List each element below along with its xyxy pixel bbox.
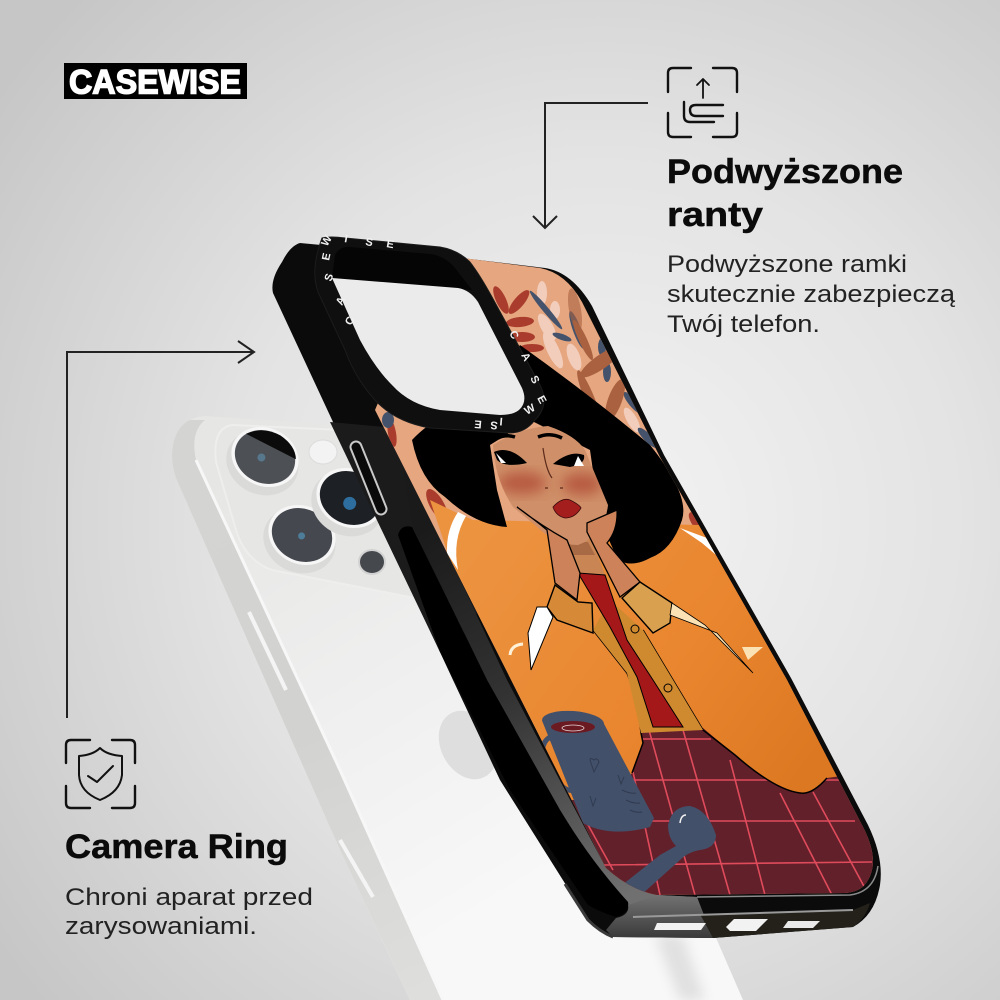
bottom-right dark section: [700, 903, 870, 938]
eyes: [494, 450, 527, 465]
icon: shield: [66, 740, 135, 808]
bottom rim highlight: [633, 910, 853, 917]
jacket placket: [593, 600, 703, 733]
side black stripe: [398, 526, 628, 917]
shirt buttons: [631, 625, 672, 692]
jacket: [430, 500, 848, 800]
lidar sensor: [359, 550, 385, 574]
lower inner bezel: [398, 440, 697, 912]
camera ring: [315, 233, 548, 433]
ring frame: [315, 237, 544, 433]
face: [493, 426, 608, 545]
arrow: to camera ring: [67, 341, 254, 718]
hair: [412, 345, 683, 564]
case shell: [272, 243, 881, 938]
phone body: [172, 416, 743, 1000]
mug: [541, 709, 654, 832]
nose: [543, 448, 563, 488]
text: raised edges description: [667, 251, 956, 338]
volume button: [356, 447, 381, 509]
right cuff: [622, 582, 672, 633]
ring label: CASEWISE: [319, 233, 395, 327]
bottom speaker hole: [726, 919, 768, 931]
red shirt: [578, 573, 683, 727]
white phone: [160, 415, 743, 1000]
arrow: to raised edges: [533, 103, 648, 228]
heading: raised edges: Podwyższone: [667, 153, 903, 191]
brand logo: CASEWISE: [69, 64, 241, 102]
table: [540, 728, 890, 900]
band highlight: [196, 460, 443, 1000]
lower-left rim: [565, 884, 613, 937]
screen edge highlight: [697, 866, 878, 897]
ring hole: [332, 278, 524, 415]
heading: camera ring: Camera Ring: [65, 828, 288, 866]
heading: raised edges: [667, 153, 903, 234]
lens 1: [215, 415, 311, 507]
right hand: [587, 510, 640, 597]
jacket arm outlines: [593, 630, 827, 793]
leaves: [382, 281, 715, 541]
collar hook: [510, 644, 523, 655]
brows: [498, 435, 562, 438]
text: camera ring description: zarysowaniami.: [65, 913, 257, 940]
cream stripe: [670, 603, 753, 673]
white collar left: [447, 512, 466, 570]
case artwork: [370, 250, 890, 900]
white collar right: [680, 528, 716, 555]
neck shadow: [570, 542, 595, 555]
text: raised edges description: Twój telefon.: [667, 311, 820, 338]
text: camera ring description: Chroni aparat przed: [65, 884, 313, 911]
text: raised edges description: skutecznie zabezpieczą: [667, 281, 956, 308]
flash: [309, 440, 337, 464]
ring inner wall: [332, 247, 472, 290]
neck: [574, 539, 605, 574]
bottom shadow streak: [655, 935, 705, 1000]
side buttons: [249, 612, 373, 897]
white collar flap: [528, 607, 553, 670]
blush: [498, 472, 602, 495]
bottom port: [654, 923, 706, 930]
phone side band: [160, 420, 443, 1000]
translucent section over phone: [330, 422, 477, 652]
bottom-left gray section: [606, 895, 713, 938]
artwork background: [370, 250, 890, 900]
left hand: [517, 507, 580, 600]
apple logo: [439, 710, 494, 780]
camera plateau: [215, 425, 425, 600]
ring label mirrored: CASEWISE: [474, 329, 548, 431]
bottom mic hole: [783, 921, 820, 928]
icon: raised edges: [668, 68, 737, 137]
spoon: [622, 806, 716, 896]
lips: [553, 499, 581, 518]
left cuff: [547, 585, 593, 633]
text: raised edges description: Podwyższone ramki: [667, 251, 907, 278]
lens 2: [252, 493, 348, 585]
phone case: [272, 243, 881, 938]
text: camera ring description: [65, 884, 313, 940]
cream flick: [742, 647, 763, 660]
lens 3: [300, 456, 396, 548]
heading: raised edges: ranty: [667, 196, 763, 234]
